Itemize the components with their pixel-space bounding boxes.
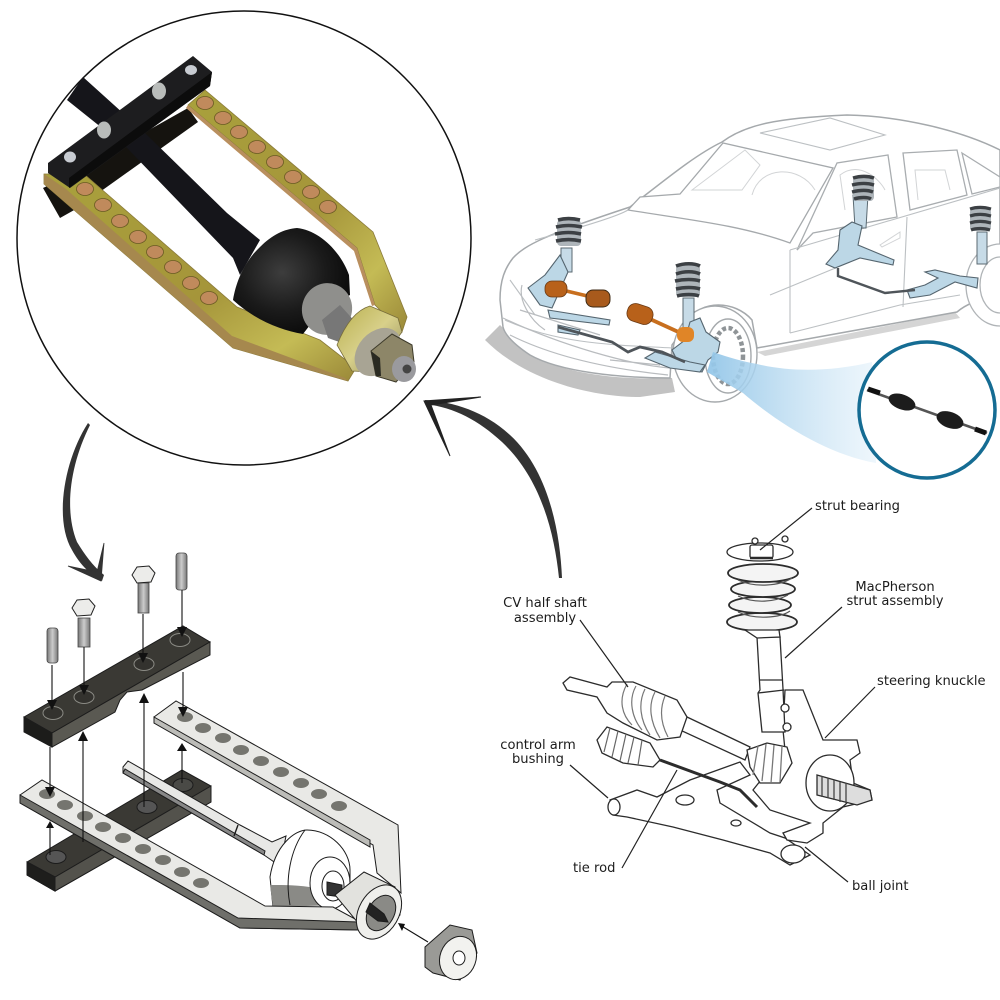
car: centre knuckle and lower arm: [645, 318, 720, 372]
label: MacPherson strut assembly: MacPherson: [855, 580, 935, 595]
arrow: curved sketch arrow to circle from strut: [424, 397, 562, 578]
photo: washer and nut: [345, 319, 411, 385]
photo: axle shaft: [67, 77, 260, 275]
label: CV half shaft assembly: assembly: [514, 611, 576, 626]
label: steering knuckle: steering knuckle: [877, 674, 986, 689]
photo: threaded collar: [337, 306, 402, 372]
photo: ball joint stub: [295, 276, 359, 342]
label: control arm bushing: bushing: [512, 752, 564, 767]
strut: inner coil shading: [738, 578, 792, 617]
leader lines: [570, 508, 875, 882]
photo: lower rear black block: [43, 108, 198, 218]
label: control arm bushing: control arm: [500, 738, 576, 753]
car: side windows: [797, 150, 1000, 250]
diagram: strut and half shaft assembly: [563, 536, 872, 865]
diagram: exploded tool view: [20, 553, 482, 985]
label: strut bearing: strut bearing: [815, 499, 900, 514]
panel: circular photo of puller tool: [17, 11, 471, 465]
arrow: curved sketch arrow from circle to exploded view: [63, 423, 104, 581]
exploded: hex nut: [425, 925, 477, 980]
car: front wheel: [673, 306, 757, 402]
exploded: lower arm bar: [20, 780, 360, 930]
label: CV half shaft assembly: CV half shaft: [503, 596, 587, 611]
exploded: studs and bolts: [47, 553, 187, 663]
tie rod shaft: [660, 760, 757, 807]
knuckle: steering knuckle: [753, 690, 872, 843]
exploded: assembly arrows: [45, 590, 428, 942]
photo: rubber CV boot: [233, 228, 350, 334]
car: interior seats and door handle: [692, 150, 950, 247]
car: body outline: [500, 115, 1000, 378]
label: ball joint: ball joint: [852, 879, 908, 894]
car: front left knuckle and arms: [528, 255, 610, 335]
exploded: arrowheads: [45, 627, 405, 931]
car: rear strut two and arm: [907, 208, 991, 298]
exploded: bolt heads: [72, 566, 155, 616]
photo: lower gold arm: [44, 174, 356, 381]
shaft: outer CV boot: [747, 743, 792, 783]
exploded: collar: [335, 872, 400, 935]
car: sunroof and body lines: [505, 118, 1000, 348]
car: ground shadow: [485, 325, 675, 397]
car: centre strut: [675, 264, 700, 328]
tie rod boot: [597, 727, 660, 767]
callout: half shaft inset: [859, 342, 995, 478]
exploded: upper black block: [24, 626, 210, 733]
car: rear wheel: [966, 244, 1000, 326]
shaft: CV half shaft bar: [680, 717, 750, 760]
knuckle: hub: [806, 755, 854, 811]
car: front left strut: [555, 218, 582, 272]
car: bumper and grille lines: [503, 285, 670, 375]
ball joint stud: [781, 845, 805, 863]
strut: damper tube: [757, 637, 785, 732]
photo: upper gold arm: [188, 90, 407, 332]
strut: coil spring: [727, 564, 798, 631]
car: windshield: [628, 143, 833, 243]
car: blue light beam: [707, 352, 876, 463]
photo: arm holes: [76, 96, 336, 304]
label: MacPherson strut assembly: strut assembly: [846, 594, 944, 609]
photo: black crossbar: [48, 56, 212, 188]
car: rear strut one: [826, 176, 894, 268]
exploded: upper arm bar: [154, 701, 401, 893]
exploded: shaft: [123, 761, 286, 866]
strut: top bearing plate: [727, 543, 793, 561]
label: tie rod: tie rod: [573, 861, 615, 876]
exploded: lower black block: [27, 770, 211, 891]
car: rear stabiliser: [838, 268, 915, 293]
illustration: car with suspension: [485, 115, 1000, 478]
photo: studs: [64, 65, 197, 162]
shaft: inner CV boot with stub: [563, 677, 687, 740]
car: orange drive shafts: [545, 281, 694, 342]
car: stabiliser bar: [558, 327, 685, 362]
exploded: CV joint ball: [270, 830, 350, 907]
control arm: [610, 762, 810, 865]
